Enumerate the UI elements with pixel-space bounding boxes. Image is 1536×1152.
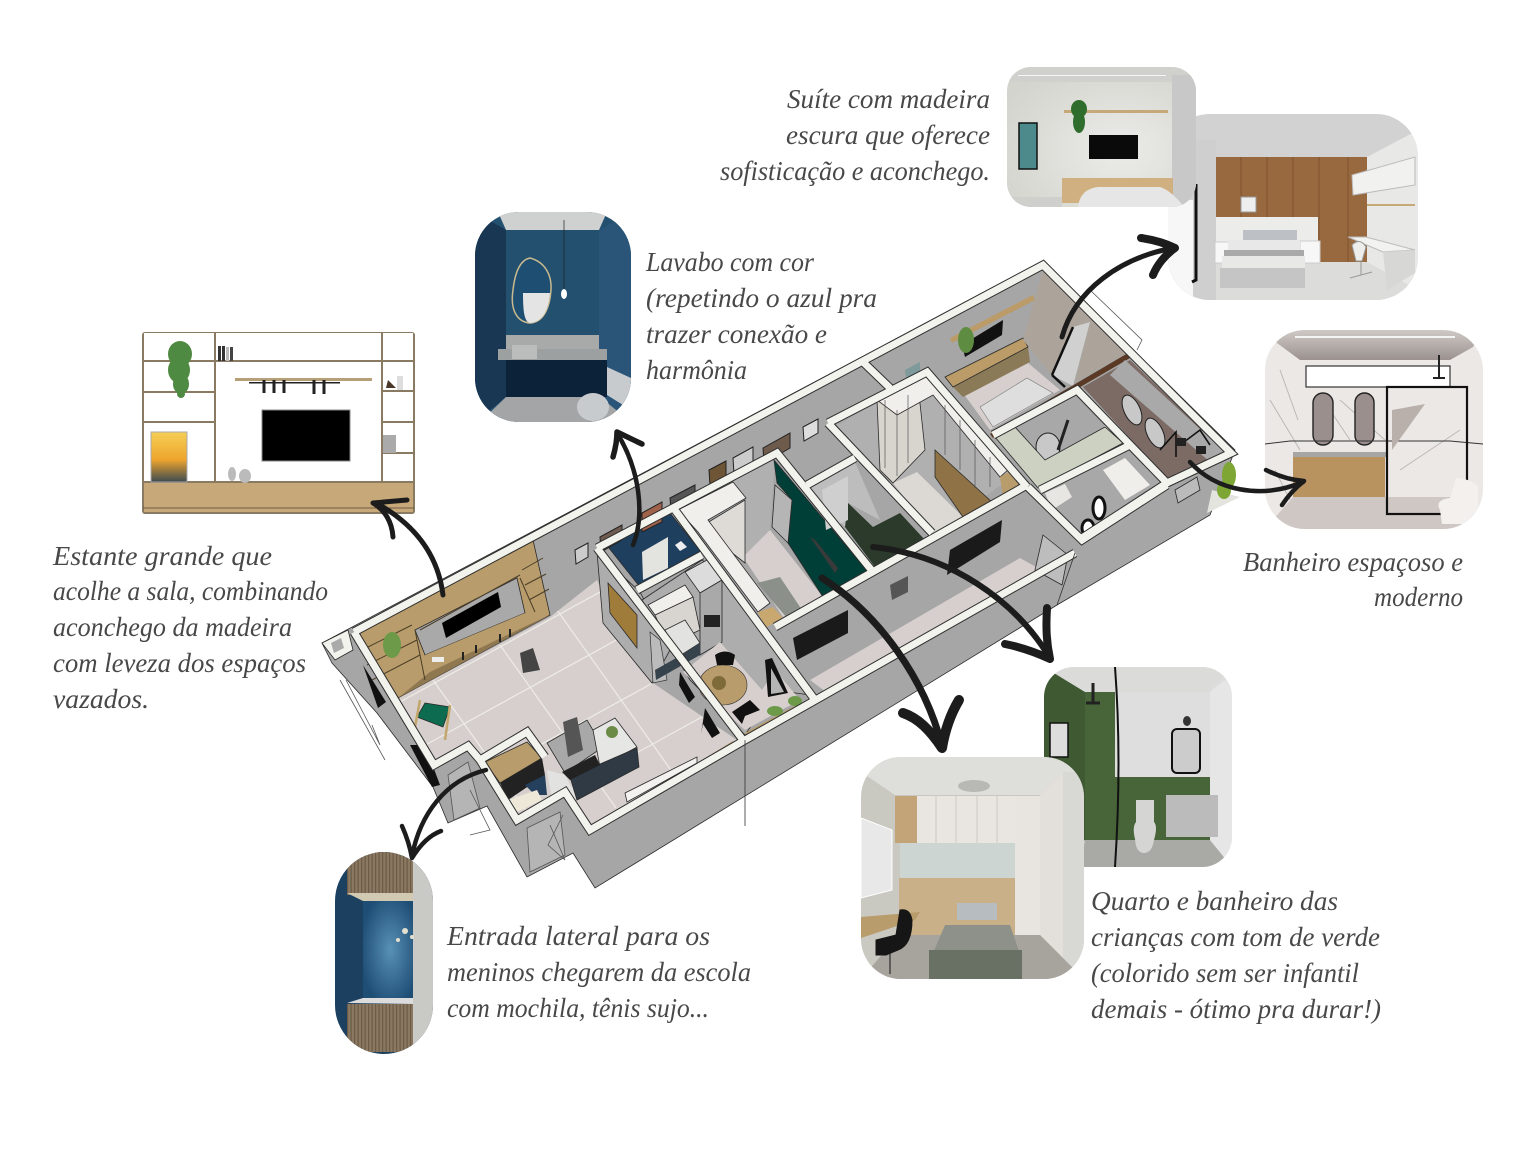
outer plant: [1217, 462, 1236, 499]
lower wood slats: [347, 1004, 413, 1052]
green L counter: [995, 427, 1123, 488]
outer balcony patch: [1207, 490, 1240, 513]
floor: [491, 397, 616, 422]
arrow: main bathroom: [1190, 462, 1304, 505]
shower glass: [1387, 387, 1467, 514]
floor: [861, 935, 1084, 979]
kitchenette cabinets: [642, 560, 810, 735]
wall art: [1241, 197, 1256, 212]
curtain: [1172, 75, 1196, 207]
text: shelf: [52, 541, 328, 714]
hooks: [396, 928, 414, 942]
wood headboard: [899, 878, 1015, 935]
text: side entrance: com mochila, tênis sujo...: [447, 993, 709, 1023]
bed: [1078, 187, 1184, 207]
text: side entrance: [446, 921, 751, 1023]
vanity: [1293, 457, 1385, 497]
lower green tile: [1115, 777, 1210, 840]
text: lavabo: harmônia: [646, 355, 747, 385]
pale wall: [900, 843, 1015, 878]
books: [218, 346, 233, 361]
floor: [1265, 497, 1483, 529]
text: kids rooms: crianças com tom de verde: [1091, 922, 1380, 952]
text: lavabo: (repetindo o azul pra: [646, 283, 877, 313]
kitchen island: [547, 717, 639, 800]
ceiling: [1195, 114, 1418, 157]
arrow: shelf to photo: [373, 500, 443, 595]
mirror: [512, 258, 551, 323]
text: suite: sofisticação e aconchego.: [720, 156, 990, 186]
text: lavabo: trazer conexão e: [646, 319, 827, 349]
floor: [1007, 197, 1062, 207]
kids room: green wall, floor and bed: [678, 458, 868, 628]
pouf: [520, 648, 540, 673]
framed picture: [151, 432, 187, 482]
vanity: [1166, 795, 1218, 837]
closet room: [832, 375, 1023, 535]
shadow on shower wall: [1392, 404, 1425, 450]
wall tops: [354, 265, 1231, 830]
text: main bathroom: [1243, 547, 1463, 612]
marble veins: [1270, 370, 1460, 500]
photo: kids bathroom: [1044, 667, 1232, 867]
arrow: kids bedroom: [822, 578, 959, 748]
wood wall: [1216, 157, 1367, 262]
kids bathroom dark tile: [807, 462, 925, 567]
black side windows: [363, 665, 440, 787]
tall closet side: [1040, 772, 1063, 958]
headboard: [1216, 217, 1318, 242]
basin top: [1293, 452, 1387, 457]
window on exterior wall: [1175, 477, 1200, 503]
suspended shelf and pendants: [235, 378, 372, 394]
door lines on the entrance: [340, 288, 1142, 872]
desk: [861, 912, 920, 938]
sink: [512, 345, 537, 359]
column inset: [331, 638, 344, 653]
planter with plants: [745, 658, 802, 742]
text: kids rooms: Quarto e banheiro das: [1091, 886, 1338, 916]
photo: kids bedroom: [861, 757, 1084, 979]
text: main bathroom: Banheiro espaçoso e: [1243, 547, 1463, 577]
ceiling: [1044, 667, 1232, 692]
wooden TV shelf wall: [355, 540, 550, 698]
shelf frame lines: [143, 332, 414, 513]
text: side entrance: Entrada lateral para os: [446, 921, 710, 951]
text: suite: escura que oferece: [786, 120, 990, 150]
photo: suite bedroom: [1168, 114, 1418, 300]
LED line: [1295, 336, 1455, 338]
small corner column: [322, 630, 353, 660]
right closet: [1015, 796, 1040, 935]
dado line: [1265, 441, 1483, 444]
black chair: [876, 910, 912, 974]
chair: [1350, 241, 1372, 278]
wood niche: [895, 796, 917, 843]
curtains: [1168, 140, 1216, 300]
lavabo room blue walls: [605, 513, 702, 587]
living room floor: [398, 580, 737, 825]
ceiling: [861, 757, 1084, 795]
exterior walls: [322, 261, 1235, 888]
dining table and chairs: [679, 642, 800, 738]
window: [861, 818, 892, 898]
shower head: [1433, 355, 1445, 378]
shower glass line: [1115, 667, 1118, 867]
text: suite: Suíte com madeira: [787, 84, 990, 114]
plant: [1071, 100, 1087, 133]
upper under-light: [347, 893, 413, 901]
wall top fill: [354, 265, 1231, 830]
text: shelf: Estante grande que: [52, 541, 272, 571]
upper closet: [917, 796, 1018, 843]
mirror reflection: [523, 293, 550, 323]
toilet: [1134, 800, 1156, 853]
shower head: [1086, 683, 1100, 703]
suite: floor, counter, bed and curtains: [905, 270, 1130, 438]
bed: [1215, 230, 1320, 288]
back wall: [363, 901, 413, 998]
text: shelf: com leveza dos espaços: [53, 648, 306, 678]
under cabinet shelf: [1367, 204, 1415, 206]
wall lamp: [1183, 716, 1191, 726]
photo: lavabo: [475, 212, 631, 422]
photo: side entrance niche: [335, 852, 433, 1054]
upper wood slats: [347, 852, 413, 895]
bulb: [561, 289, 567, 299]
suite bathroom: [1083, 360, 1227, 482]
ceiling: [1265, 330, 1483, 360]
white door panel: [413, 852, 433, 1054]
hallway floor and TV: [793, 520, 1068, 695]
arrow: lavabo: [613, 432, 642, 545]
round mirrors: [1313, 393, 1374, 445]
white curtain band: [1168, 200, 1193, 300]
text: kids rooms: (colorido sem ser infantil: [1091, 958, 1359, 988]
text: kids rooms: [1091, 886, 1381, 1024]
gray column: [1063, 772, 1084, 979]
floor: [1216, 262, 1408, 300]
desk top: [1348, 237, 1415, 252]
desk side: [1383, 250, 1415, 281]
lower slat lines: [347, 1004, 413, 1052]
text: kids rooms: demais - ótimo pra durar!): [1091, 994, 1381, 1024]
text: lavabo: [645, 247, 877, 385]
lower bathroom: [1045, 447, 1167, 537]
wooden headboard: [1062, 178, 1173, 203]
dark cabinet: [506, 360, 607, 397]
arrow: suite: [1062, 238, 1175, 337]
wood shelf: [1064, 110, 1168, 113]
photo: main bathroom: [1265, 330, 1483, 529]
toilet: [577, 367, 631, 421]
green wall: [1044, 667, 1085, 867]
upper slat lines: [347, 852, 413, 894]
photo: suite wall with TV: [1007, 67, 1196, 207]
arrow: side entrance: [402, 770, 486, 858]
green armchair: [417, 703, 450, 727]
text: lavabo: Lavabo com cor: [645, 247, 814, 277]
tub room: [1017, 395, 1105, 461]
right wall: [1210, 675, 1232, 867]
central room gray wall with wood panel: [597, 552, 670, 683]
wall cabinet: [1352, 157, 1415, 195]
text: shelf: acolhe a sala, combinando: [53, 576, 328, 606]
TV: [1089, 135, 1138, 159]
wood base: [143, 482, 415, 514]
TV screen: [262, 410, 350, 461]
photo: living room shelving elevation: [142, 332, 415, 514]
window: [1050, 723, 1068, 757]
separation line on exterior wall: [745, 553, 1075, 826]
mirror: [1172, 729, 1200, 773]
LED line: [1018, 75, 1166, 76]
bench by the front wall: [590, 741, 735, 830]
hanging plant on shelf: [383, 632, 401, 658]
text: main bathroom: moderno: [1374, 582, 1463, 612]
wooden chair legs: [415, 700, 450, 740]
counter: [506, 335, 599, 349]
closet joints: [936, 796, 997, 843]
toilet: [1438, 478, 1478, 524]
panel joints: [1241, 157, 1348, 262]
text: shelf: vazados.: [53, 684, 149, 714]
hanging plant: [168, 341, 192, 398]
counter front: [498, 349, 607, 360]
window: [1306, 366, 1450, 387]
pendant light: [564, 220, 565, 290]
ceiling lamp: [958, 780, 990, 792]
gallery of framed pictures: [575, 419, 818, 564]
text: side entrance: meninos chegarem da escola: [447, 957, 751, 987]
bed: [929, 903, 1022, 979]
closet counter at entrance: [485, 742, 547, 812]
floor: [1080, 840, 1232, 867]
decorative objects: [228, 376, 403, 483]
lower bench: [347, 998, 413, 1004]
floor tile lines: [401, 592, 703, 810]
arrow: kids bathroom: [873, 547, 1050, 659]
text: shelf: aconchego da madeira: [53, 612, 292, 642]
black door frame: [1192, 184, 1196, 282]
text: suite: [720, 84, 990, 186]
green tile: [1085, 692, 1115, 840]
abstract picture: [1019, 123, 1037, 169]
floor plan: 3D isometric model: [322, 261, 1240, 888]
